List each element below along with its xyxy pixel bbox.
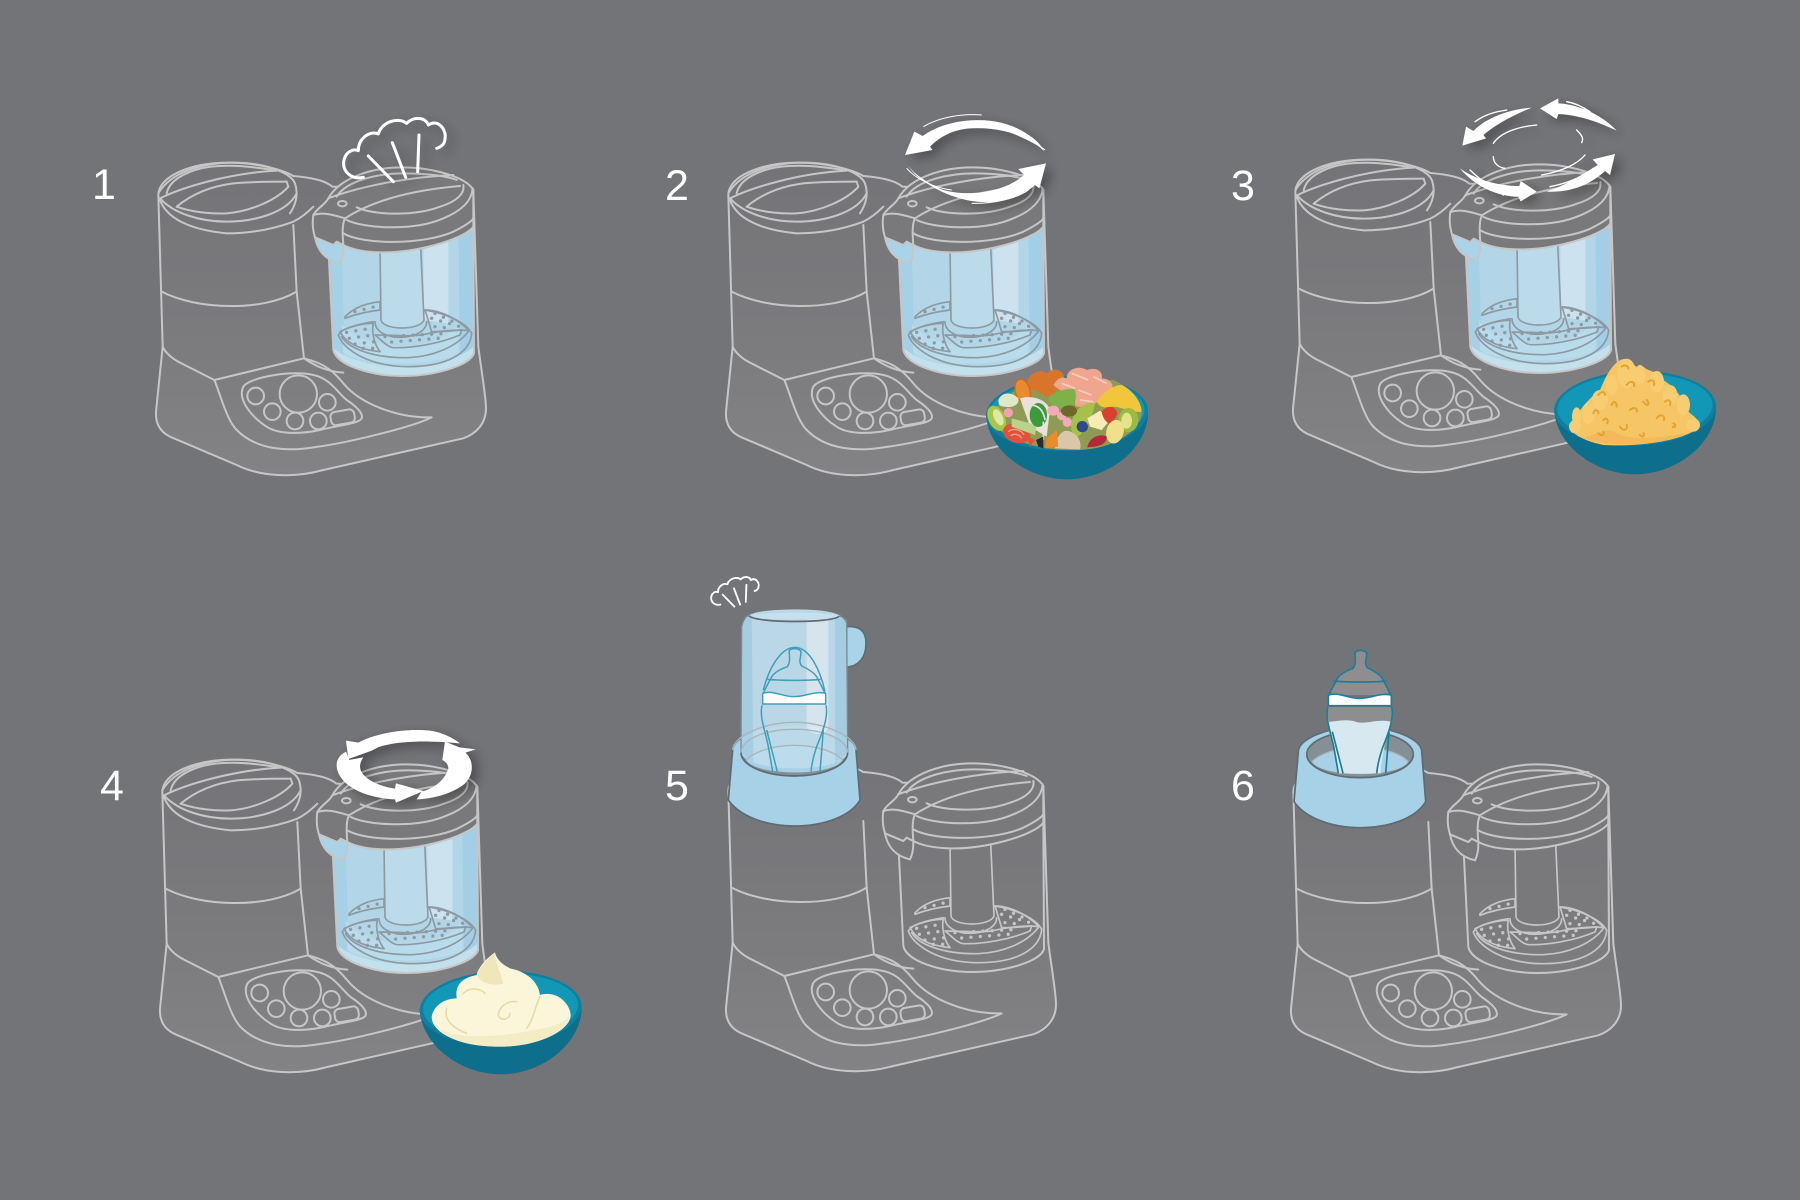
arrows: two curved pulses [905,115,1046,203]
bottle warmer with bottle [1294,650,1426,828]
step 5 panel [665,577,1056,1071]
bowl of puree [418,952,583,1074]
bottle warmer with glass and bottle [728,609,866,826]
step 1 panel [92,118,486,475]
food maker with blue jar [160,760,490,1072]
step 6 panel [1231,650,1621,1072]
number 6: 6 [1231,762,1255,810]
arrows: circular blend [337,730,476,803]
bowl of chopped vegetables and meat [983,368,1149,479]
icon: small steam [711,577,759,607]
icon: steam [344,118,445,182]
food maker with empty jar [1291,760,1621,1072]
number 5: 5 [665,762,689,810]
number 2: 2 [665,162,689,210]
number 3: 3 [1231,162,1255,210]
number 4: 4 [100,762,124,810]
food maker with blue jar [156,163,486,475]
food maker with blue jar [726,163,1056,475]
number 1: 1 [92,161,116,209]
step 4 panel [100,730,583,1074]
food maker with blue jar [1293,160,1623,472]
arrows: four swirl pulses [1460,98,1617,201]
step 2 panel [665,115,1149,479]
step 3 panel [1231,98,1717,474]
bowl of macaroni [1553,359,1717,474]
food maker with empty jar [726,759,1056,1071]
